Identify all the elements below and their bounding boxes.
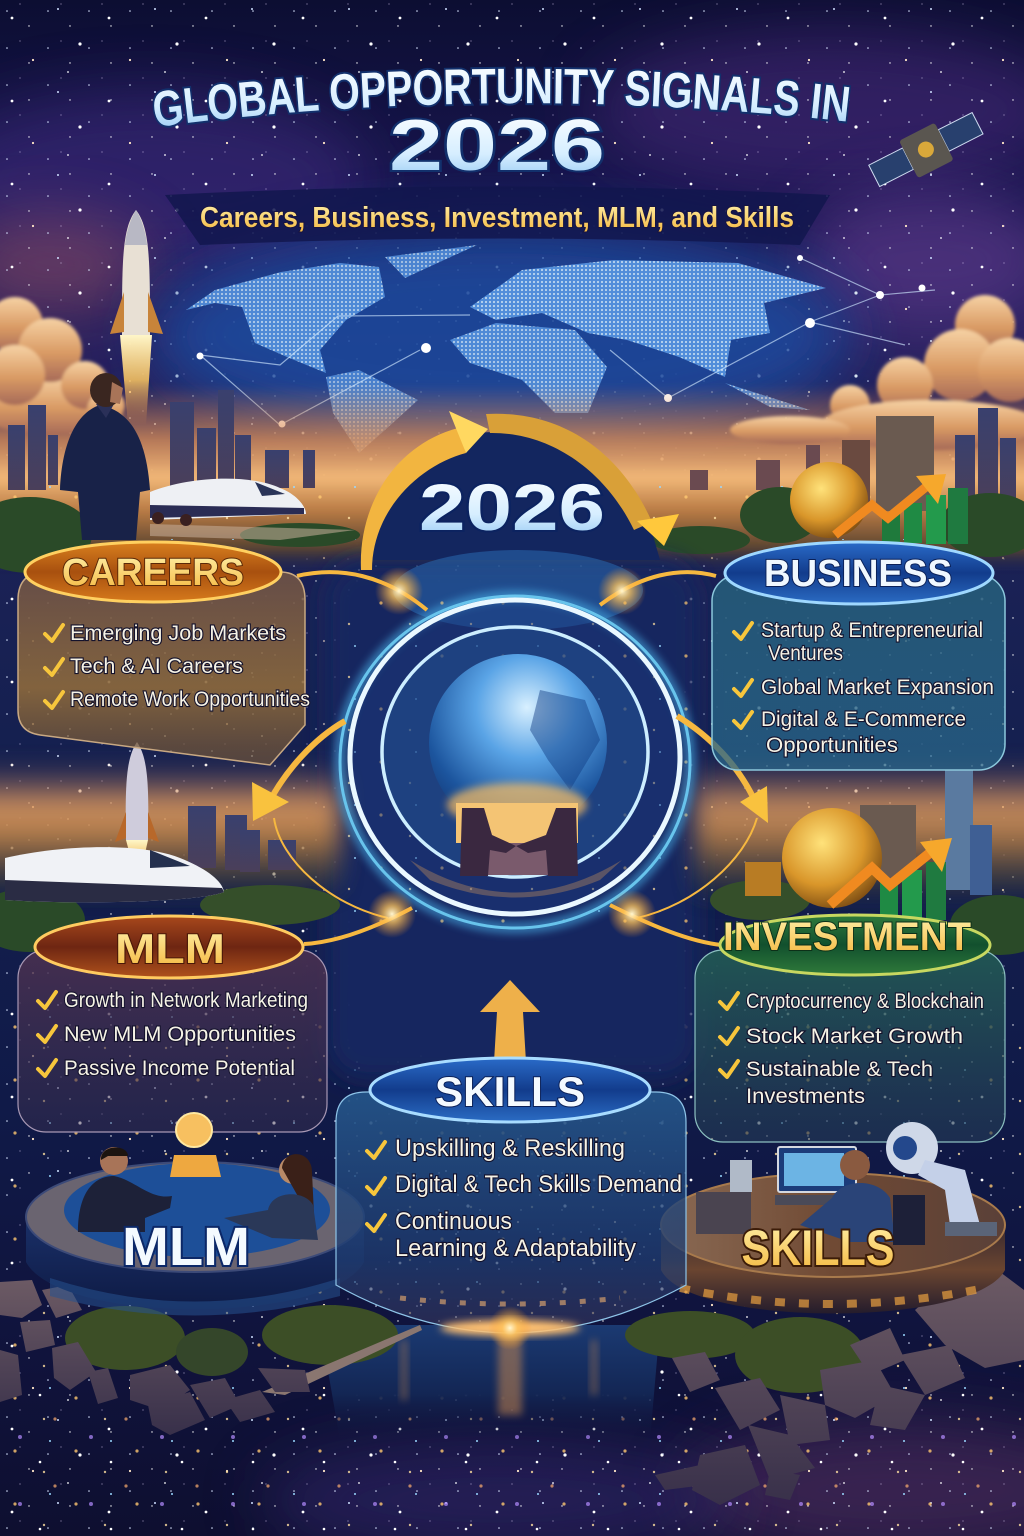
central globe with rings xyxy=(340,550,690,930)
panel: skills xyxy=(336,1058,686,1350)
subtitle ribbon: Careers, Business, Investment, MLM, and Skills xyxy=(200,202,794,234)
panel: business xyxy=(712,542,1005,770)
clouds: left xyxy=(0,297,125,435)
subtitle ribbon xyxy=(165,186,830,245)
business pill heading xyxy=(725,542,993,604)
investment list: Sustainable & Tech xyxy=(746,1058,933,1081)
bullet train: middle xyxy=(5,847,224,902)
panel: careers xyxy=(18,542,310,765)
investment pill heading: INVESTMENT xyxy=(723,915,971,959)
skills list: Upskilling & Reskilling xyxy=(395,1135,625,1162)
investment list: Cryptocurrency & Blockchain xyxy=(746,990,984,1013)
careers pill heading: CAREERS xyxy=(62,552,244,594)
platform label: mlm: MLM xyxy=(122,1217,250,1277)
skyline: upper right city xyxy=(690,408,1016,511)
satellite xyxy=(865,105,988,195)
mlm list: Passive Income Potential xyxy=(64,1057,295,1080)
careers list: Tech & AI Careers xyxy=(70,655,243,678)
skills list xyxy=(367,1135,682,1262)
world map xyxy=(150,225,935,453)
horizon glow xyxy=(0,385,1024,570)
business chart: top right xyxy=(790,462,968,544)
central navy backdrop xyxy=(325,560,700,1080)
people at mlm table xyxy=(78,1113,318,1240)
panel: mlm xyxy=(18,916,327,1132)
mlm list: Growth in Network Marketing xyxy=(64,989,308,1012)
water with reflections xyxy=(320,1325,660,1440)
top circular arrow xyxy=(361,411,679,570)
skyline: upper left city xyxy=(8,390,315,490)
careers pill heading xyxy=(25,542,281,602)
bottom left platform xyxy=(26,1162,364,1316)
middle landscape: left xyxy=(0,762,340,952)
rocket: middle xyxy=(115,742,159,885)
skills list: Learning & Adaptability xyxy=(395,1235,636,1262)
careers list xyxy=(45,622,310,711)
treeline upper xyxy=(0,487,1024,573)
investment chart: middle right xyxy=(745,770,992,920)
investment list: Investments xyxy=(746,1085,865,1108)
handshake xyxy=(447,783,587,876)
panel: investment xyxy=(695,915,1005,1142)
business list: Ventures xyxy=(768,642,843,665)
business list: Digital & E-Commerce xyxy=(761,708,966,731)
clouds: right xyxy=(730,295,1024,450)
bullet train: top xyxy=(150,479,355,540)
careers list: Remote Work Opportunities xyxy=(70,688,310,711)
title: 2026 xyxy=(389,106,605,186)
business list: Startup & Entrepreneurial xyxy=(761,619,983,642)
business list: Opportunities xyxy=(766,734,898,757)
skills pill heading: SKILLS xyxy=(435,1068,585,1115)
bottom right platform xyxy=(661,1173,1005,1314)
mlm list xyxy=(38,989,308,1080)
business pill heading: BUSINESS xyxy=(764,553,952,595)
mlm pill heading xyxy=(35,916,303,978)
investment list xyxy=(720,990,984,1108)
skills pill heading xyxy=(370,1058,650,1122)
platform label: skills: SKILLS xyxy=(742,1220,894,1276)
rocks and bushes: bottom left xyxy=(0,1280,422,1435)
workstation with robot xyxy=(696,1122,997,1245)
up arrow xyxy=(480,980,540,1062)
business list xyxy=(734,619,994,757)
investment list: Stock Market Growth xyxy=(746,1025,963,1048)
2026 dome xyxy=(362,432,660,560)
title xyxy=(152,66,851,186)
business list: Global Market Expansion xyxy=(761,676,994,699)
mlm pill heading: MLM xyxy=(115,925,225,972)
skills list: Digital & Tech Skills Demand xyxy=(395,1171,682,1198)
sparks xyxy=(368,567,656,938)
businessman xyxy=(60,373,150,540)
skills list: Continuous xyxy=(395,1208,512,1235)
arrowheads xyxy=(252,782,768,823)
connector arrows xyxy=(266,572,758,945)
careers list: Emerging Job Markets xyxy=(70,622,286,645)
year label: 2026 xyxy=(419,470,605,544)
mlm list: New MLM Opportunities xyxy=(64,1023,296,1046)
rocks and bushes: bottom right xyxy=(625,1272,1024,1505)
middle landscape: right xyxy=(695,760,1024,955)
title: GLOBAL OPPORTUNITY SIGNALS IN xyxy=(152,66,851,128)
rocket: top xyxy=(110,210,163,425)
